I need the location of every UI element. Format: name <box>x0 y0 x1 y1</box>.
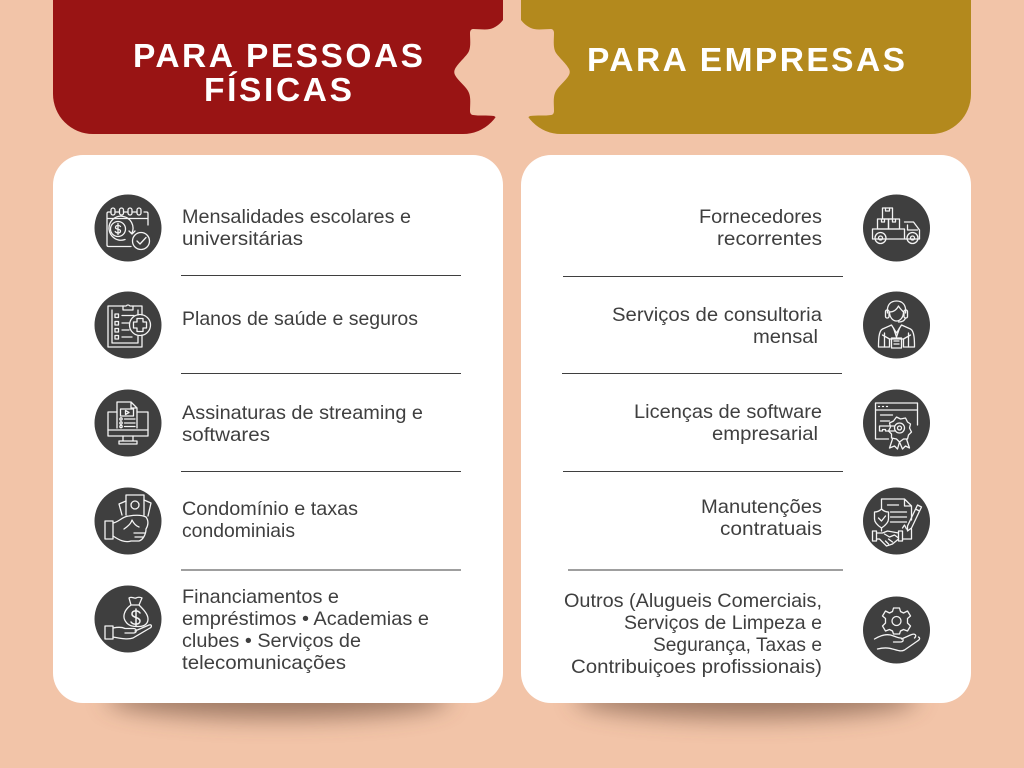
list text: pessoas físicas <box>182 206 429 674</box>
list text: empresas: recorrentes <box>717 228 822 250</box>
list text: empresas: Serviços de Limpeza e <box>624 612 822 634</box>
icon: clipboard with medical cross <box>94 292 162 358</box>
icon: software license <box>863 390 930 456</box>
list text: pessoas físicas: Assinaturas de streaming e <box>182 402 423 424</box>
list text: pessoas físicas: softwares <box>182 424 270 446</box>
list text: empresas: Outros (Alugueis Comerciais, <box>564 590 822 612</box>
panel: pessoas físicas <box>53 155 503 703</box>
list text: empresas: Contribuiçoes profissionais) <box>571 656 822 678</box>
heading: para pessoas físicas <box>133 38 423 109</box>
icon: monitor with video document <box>94 390 162 456</box>
panel: empresas <box>521 155 971 703</box>
list text: empresas: empresarial <box>712 423 818 445</box>
header: para empresas <box>521 0 971 134</box>
heading: para empresas: PARA EMPRESAS <box>587 42 905 79</box>
header: para pessoas físicas <box>53 0 503 134</box>
list text: pessoas físicas: universitárias <box>182 228 303 250</box>
icon: consultant with headset <box>863 292 930 358</box>
icon: gear over open hand <box>863 596 930 664</box>
list text: pessoas físicas: Mensalidades escolares e <box>182 206 411 228</box>
list text: empresas: Manutenções <box>701 496 822 518</box>
shadow: left card <box>106 678 450 718</box>
heading: para pessoas físicas: FÍSICAS <box>204 71 352 109</box>
puzzle connector shape <box>454 12 570 128</box>
icon: contract with handshake <box>863 488 930 554</box>
list text: empresas: mensal <box>753 326 818 348</box>
icon: hand holding money <box>94 488 162 554</box>
list text: empresas: Fornecedores <box>699 206 822 228</box>
list text: empresas: Licenças de software <box>634 401 822 423</box>
list text: pessoas físicas: Condomínio e taxas <box>182 498 358 520</box>
heading: para pessoas físicas: PARA PESSOAS <box>133 38 423 75</box>
icon: hand holding money bag <box>94 586 162 652</box>
list text: empresas: contratuais <box>720 518 822 540</box>
list text: pessoas físicas: Financiamentos e <box>182 586 339 608</box>
list text: empresas: Segurança, Taxas e <box>653 634 822 656</box>
list text: empresas <box>564 206 822 678</box>
list text: pessoas físicas: Planos de saúde e seguros <box>182 308 418 330</box>
list text: pessoas físicas: empréstimos • Academias e <box>182 608 429 630</box>
icon: delivery truck <box>863 194 930 262</box>
list text: empresas: Serviços de consultoria <box>612 304 822 326</box>
list text: pessoas físicas: condominiais <box>182 520 295 542</box>
list text: pessoas físicas: clubes • Serviços de <box>182 630 361 652</box>
list text: pessoas físicas: telecomunicações <box>182 652 346 674</box>
icon: calendar with payment <box>94 194 162 262</box>
shadow: right card <box>574 678 918 718</box>
